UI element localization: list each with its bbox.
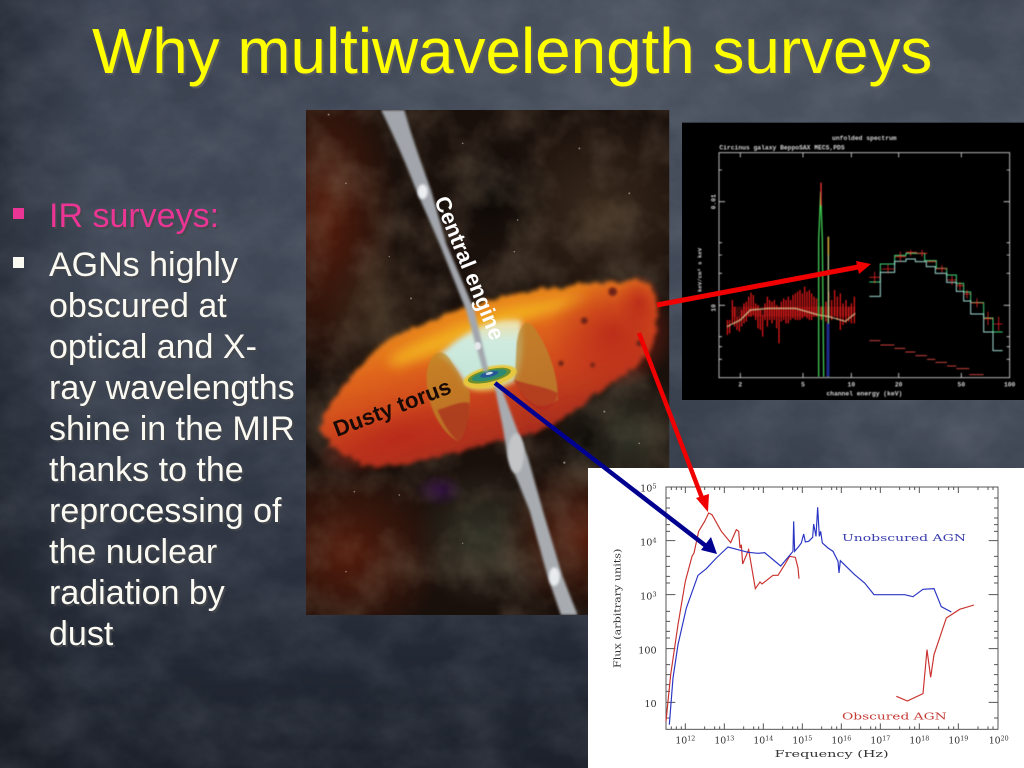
bullet: AGNs explanation: [13, 246, 295, 653]
torus body: [319, 280, 657, 466]
x tick labels: 15: [804, 735, 812, 743]
panel: AGN flux chart: [588, 468, 1024, 768]
panel: X-ray spectrum chart: [682, 123, 1024, 400]
y tick labels: [638, 483, 657, 710]
hard band red crosses: [869, 250, 1003, 331]
axis labels: 10: [710, 304, 717, 312]
x tick labels: 10: [675, 735, 687, 746]
soft band red noise: [732, 297, 855, 327]
torus red right end: [561, 284, 669, 386]
axis labels: 5: [801, 381, 805, 388]
bullet: AGNs explanation: dust: [49, 615, 114, 653]
x tick labels: 10: [831, 735, 843, 746]
arrow: red to X-ray spectrum: [657, 261, 871, 305]
label: Dusty torus: Dusty torus: [330, 374, 454, 442]
label: Central engine: Central engine: [429, 193, 510, 344]
accretion disc: [462, 364, 518, 388]
legend: unobscured: Unobscured AGN: [842, 533, 967, 544]
axis labels: 50: [958, 381, 965, 388]
bullet: IR surveys: IR surveys:: [49, 197, 219, 235]
bullet: AGNs explanation: radiation by: [49, 574, 225, 612]
x tick labels: 14: [765, 735, 773, 743]
axis labels: 0.01: [710, 194, 717, 209]
x tick labels: 10: [948, 735, 960, 746]
bullet: AGNs explanation: thanks to the: [49, 451, 244, 489]
plot frame and ticks: [666, 487, 998, 729]
x tick labels: 16: [843, 735, 851, 743]
y tick labels: 100: [638, 645, 657, 656]
bullet: AGNs explanation: shine in the MIR: [49, 410, 295, 448]
emission lines: [819, 192, 824, 377]
y tick labels: 10: [640, 483, 652, 494]
x tick labels: 18: [921, 735, 929, 743]
x tick labels: [675, 735, 1009, 746]
panel: AGN flux chart: Flux (arbitrary units): [613, 549, 624, 668]
x tick labels: 10: [714, 735, 726, 746]
bullet text block: [13, 197, 295, 653]
axis labels: 20: [895, 381, 903, 388]
bullet: AGNs explanation: optical and X-: [49, 328, 257, 366]
stars: [328, 114, 640, 572]
axis labels: keV/cm² s keV: [696, 247, 703, 292]
arrow: blue to unobscured curve: [495, 383, 717, 554]
x tick labels: 13: [726, 735, 734, 743]
axis labels: [696, 194, 1016, 397]
axes: [719, 153, 1010, 378]
axis labels: 2: [738, 381, 742, 388]
axis labels: 10: [848, 381, 855, 388]
x tick labels: 19: [960, 735, 968, 743]
axis titles: Frequency (Hz): [775, 749, 889, 760]
arrow: red to obscured peak: [639, 333, 709, 512]
y tick labels: 4: [652, 537, 657, 545]
y tick labels: 10: [640, 591, 652, 602]
y tick labels: 3: [652, 591, 657, 599]
bullet: AGNs explanation: reprocessing of: [49, 492, 282, 530]
x tick labels: 10: [792, 735, 804, 746]
y tick labels: 10: [644, 699, 657, 710]
axis labels: 100: [1004, 381, 1016, 388]
torus cross-section right: [514, 323, 558, 406]
x tick labels: 10: [909, 735, 921, 746]
bullet: AGNs explanation: obscured at: [49, 287, 227, 325]
jet: upper: [381, 110, 489, 372]
torus upper glow: [386, 295, 593, 367]
x tick labels: 10: [989, 735, 1001, 746]
torus cross-section left: [427, 353, 470, 441]
curve: obscured AGN: [666, 513, 974, 721]
x tick labels: 10: [753, 735, 765, 746]
x tick labels: 10: [870, 735, 882, 746]
bullet: AGNs explanation: AGNs highly: [49, 246, 238, 284]
legend: obscured: Obscured AGN: [842, 711, 947, 722]
hard band model green: [869, 253, 1003, 332]
axis labels: channel energy (keV): [826, 390, 902, 397]
jet: lower: [494, 385, 578, 615]
x tick labels: 17: [882, 735, 890, 743]
inner cavity glow: [439, 320, 522, 391]
dark spots: [558, 287, 642, 367]
panel: AGN illustration: [306, 110, 670, 615]
x tick labels: 12: [687, 735, 695, 743]
bullet: AGNs explanation: ray wavelengths: [49, 369, 295, 407]
bullet: AGNs explanation: the nuclear: [49, 533, 217, 571]
y tick labels: 10: [640, 537, 652, 548]
title: Why multiwavelength surveys: [92, 15, 932, 87]
curve: unobscured AGN: [669, 507, 951, 725]
panel: X-ray spectrum chart: Circinus galaxy BeppoSAX MECS,PDS: [719, 144, 845, 151]
reflection component dashed: [869, 341, 984, 375]
chart titles: unfolded spectrum: [832, 135, 897, 142]
x tick labels: 20: [1001, 736, 1009, 743]
y tick labels: 5: [652, 483, 657, 491]
